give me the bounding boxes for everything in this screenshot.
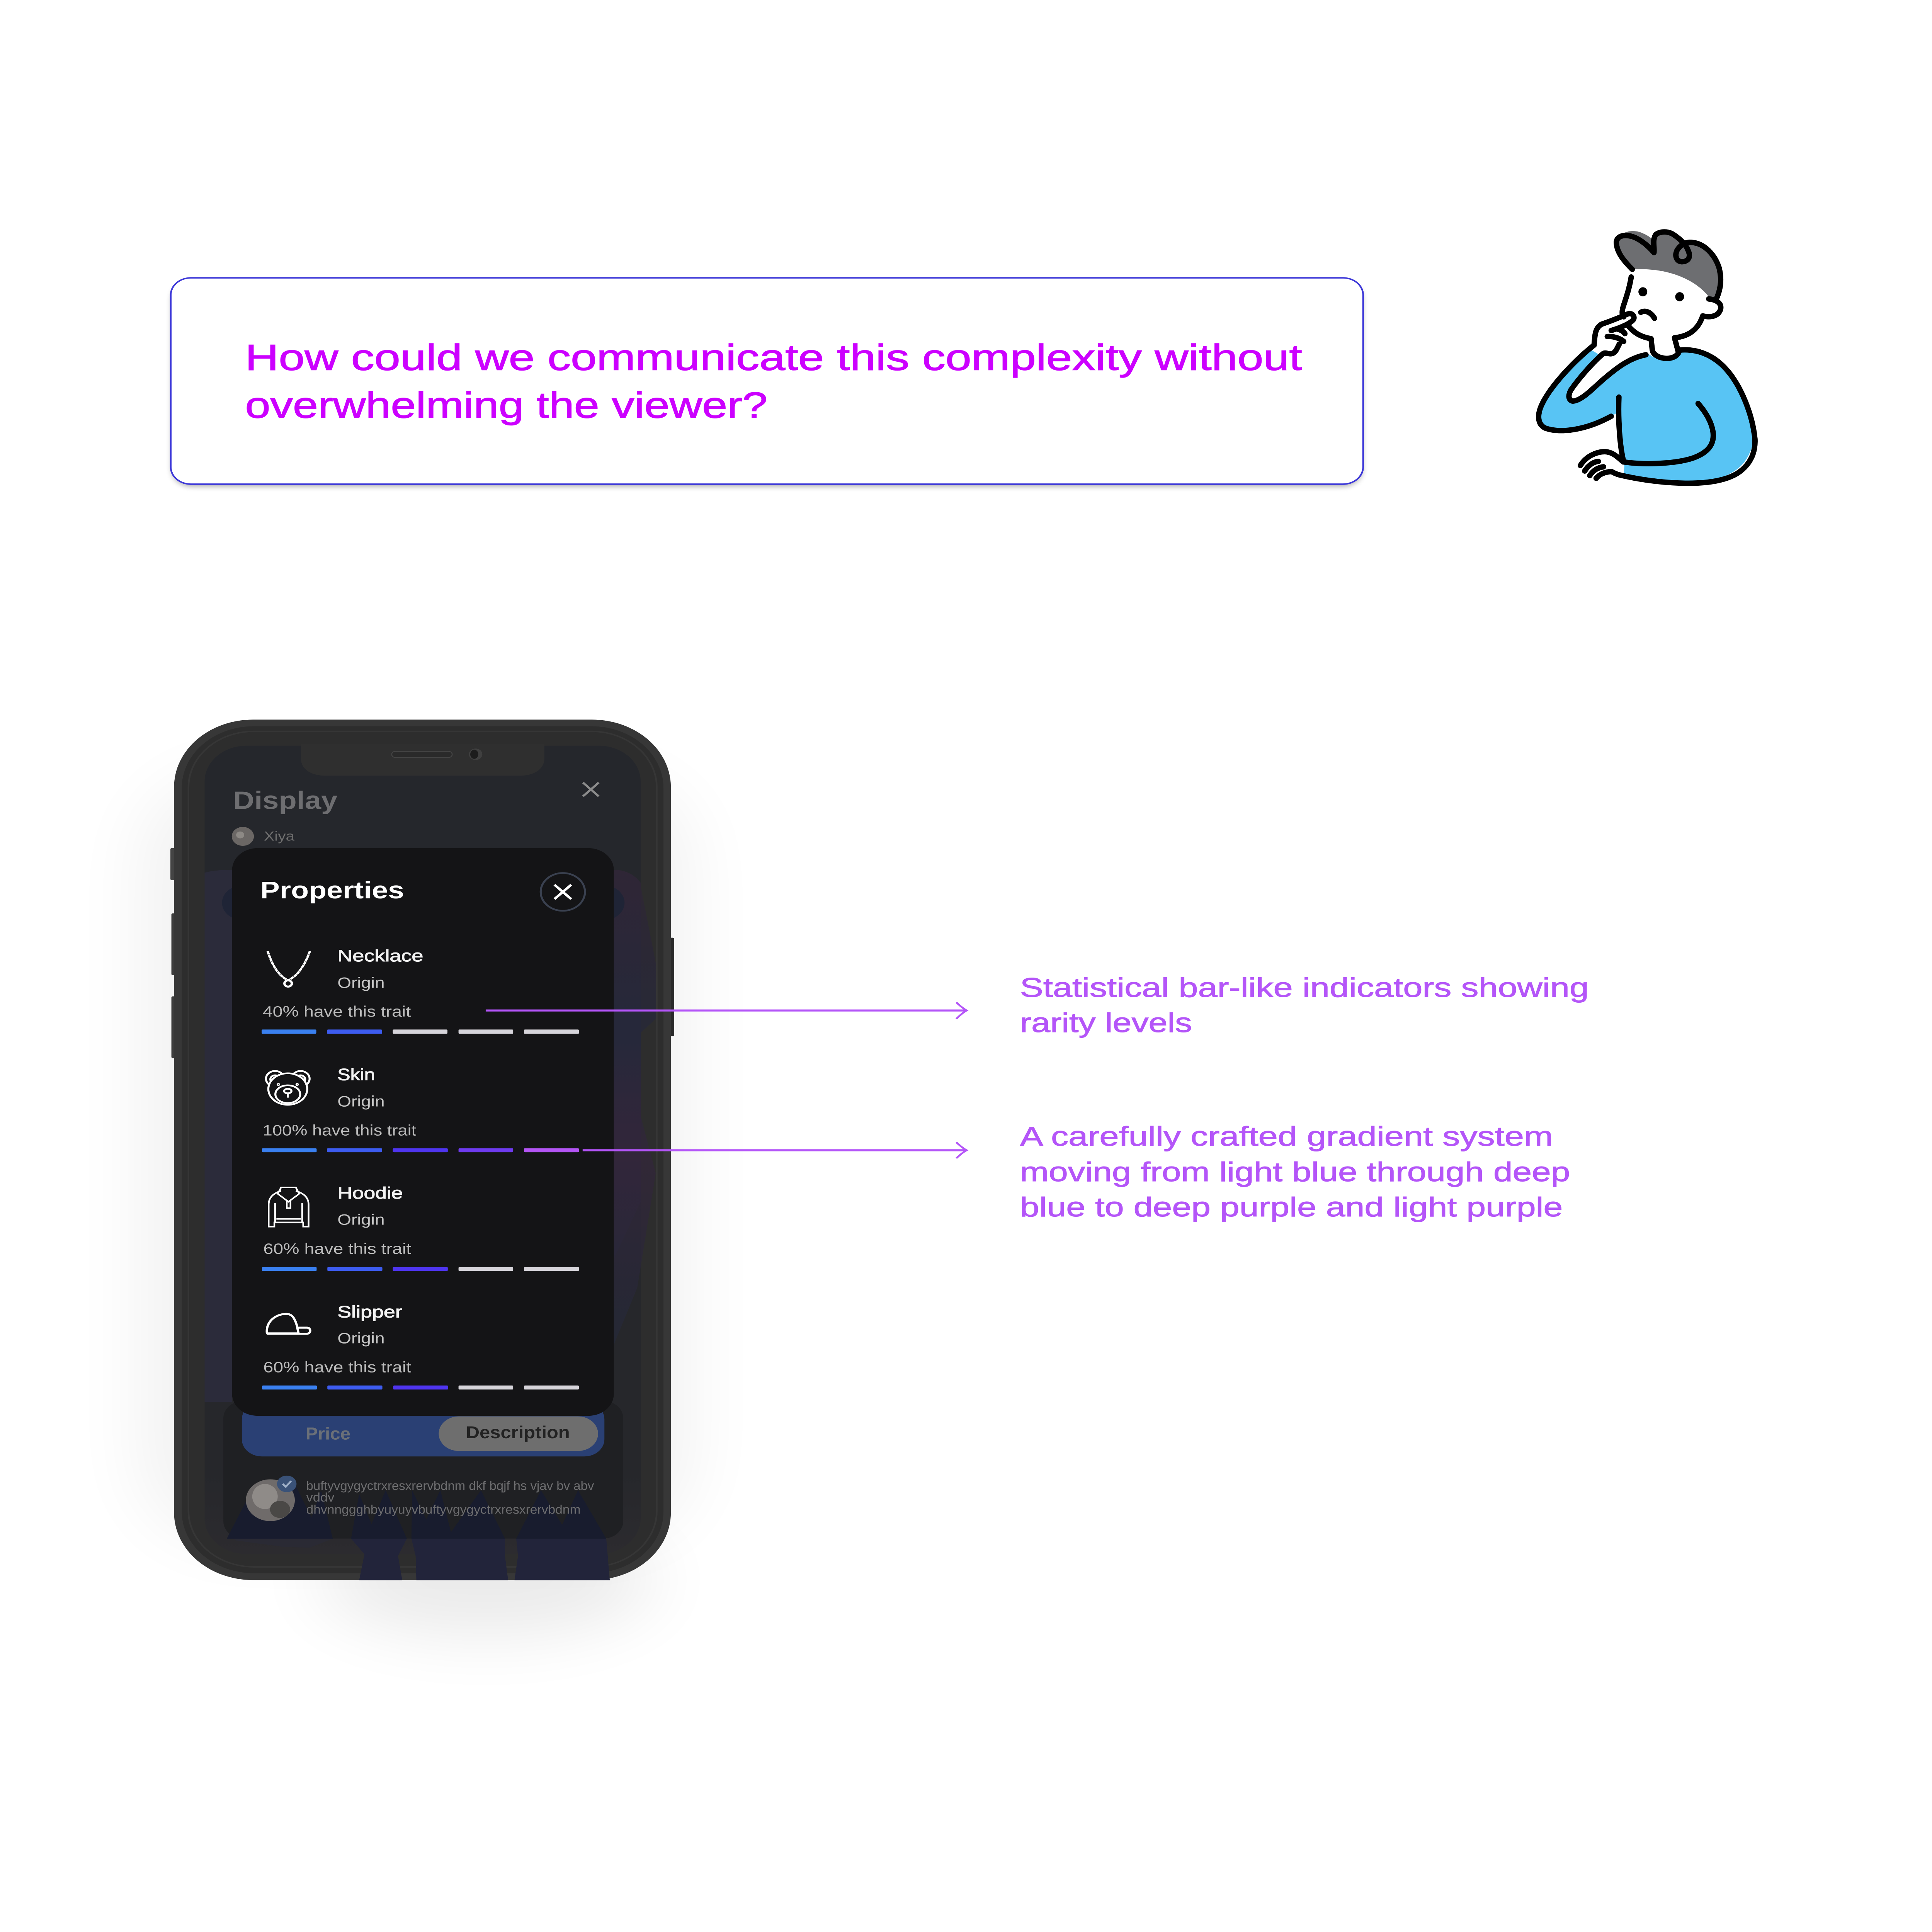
icon: thinking character <box>1539 231 1755 483</box>
avatar: Xiya: Xiya <box>264 828 295 844</box>
seller description text: buftyvgygyctrxresxrervbdnm dkf bqjf hs vjav bv abv <box>306 1479 594 1493</box>
phone mockup <box>141 719 691 1637</box>
property row: Hoodie <box>262 1184 579 1271</box>
rarity bar: 60% <box>262 1267 579 1271</box>
icon: necklace <box>268 951 310 986</box>
callout box: question <box>171 278 1363 487</box>
property row: Hoodie: 60% have this trait <box>263 1240 412 1257</box>
question text <box>245 337 1302 425</box>
seller description text: vddv <box>306 1490 335 1505</box>
phone body <box>174 719 671 1580</box>
question text: How could we communicate this complexity without <box>245 337 1302 378</box>
seller description text: dhvnnggghbyuyuyvbuftyvgygyctrxresxrervbdnm <box>306 1502 581 1517</box>
icon: slipper <box>267 1314 310 1334</box>
property row: Hoodie: Hoodie <box>337 1184 403 1202</box>
navy shards <box>227 1478 610 1580</box>
arrow: gradient system <box>583 1142 967 1158</box>
annotation: gradient system: moving from light blue through deep <box>1020 1157 1570 1187</box>
property row: Necklace <box>262 947 579 1034</box>
annotation: bar indicators: Statistical bar-like indicators showing <box>1020 973 1589 1003</box>
avatar: Xiya <box>232 827 295 846</box>
property row: Slipper: Origin <box>337 1330 385 1347</box>
notch <box>301 744 544 776</box>
property row: Necklace: 40% have this trait <box>263 1003 411 1020</box>
property row: Necklace: Origin <box>337 974 385 991</box>
property row: Necklace: Necklace <box>337 947 423 965</box>
annotation: gradient system: A carefully crafted gradient system <box>1020 1122 1553 1152</box>
property row: Slipper: Slipper <box>337 1303 402 1321</box>
property row: Hoodie: Origin <box>337 1211 385 1228</box>
panel: properties modal <box>232 848 614 1416</box>
modal heading: Properties <box>260 877 404 904</box>
annotation: bar indicators <box>1020 973 1589 1038</box>
icon: bear <box>266 1071 310 1105</box>
screen title: Display: Display <box>233 787 338 815</box>
annotation: bar indicators: rarity levels <box>1020 1008 1192 1038</box>
phone screen <box>205 746 641 1554</box>
icon: hoodie <box>269 1187 309 1227</box>
arrow: bar indicators <box>486 1002 967 1019</box>
phone drop shadow <box>141 772 691 1637</box>
rarity bar: 60% <box>262 1386 579 1389</box>
property row: Skin: Skin <box>337 1065 375 1084</box>
lower panel background <box>223 1401 623 1539</box>
question text: overwhelming the viewer? <box>245 385 767 425</box>
property row: Slipper <box>262 1303 579 1389</box>
rarity bar: 100% <box>262 1148 579 1152</box>
icon: screen close <box>583 782 599 796</box>
icon: modal close <box>541 873 585 911</box>
property row: Skin: 100% have this trait <box>263 1122 417 1139</box>
rarity bar: 40% <box>262 1029 579 1034</box>
tab switch: Price / Description <box>242 1402 604 1456</box>
annotation: gradient system: blue to deep purple and light purple <box>1020 1192 1563 1223</box>
property row: Slipper: 60% have this trait <box>263 1359 412 1376</box>
annotation: gradient system <box>1020 1122 1570 1223</box>
tab switch: Price / Description: Description <box>466 1423 570 1442</box>
property row: Skin <box>262 1065 579 1152</box>
background art behind modal <box>205 870 656 1402</box>
seller description text <box>306 1479 594 1517</box>
tab switch: Price / Description: Price <box>306 1424 350 1444</box>
phone side buttons <box>170 848 674 1058</box>
property row: Skin: Origin <box>337 1093 385 1110</box>
seller avatar with badge <box>246 1476 296 1521</box>
